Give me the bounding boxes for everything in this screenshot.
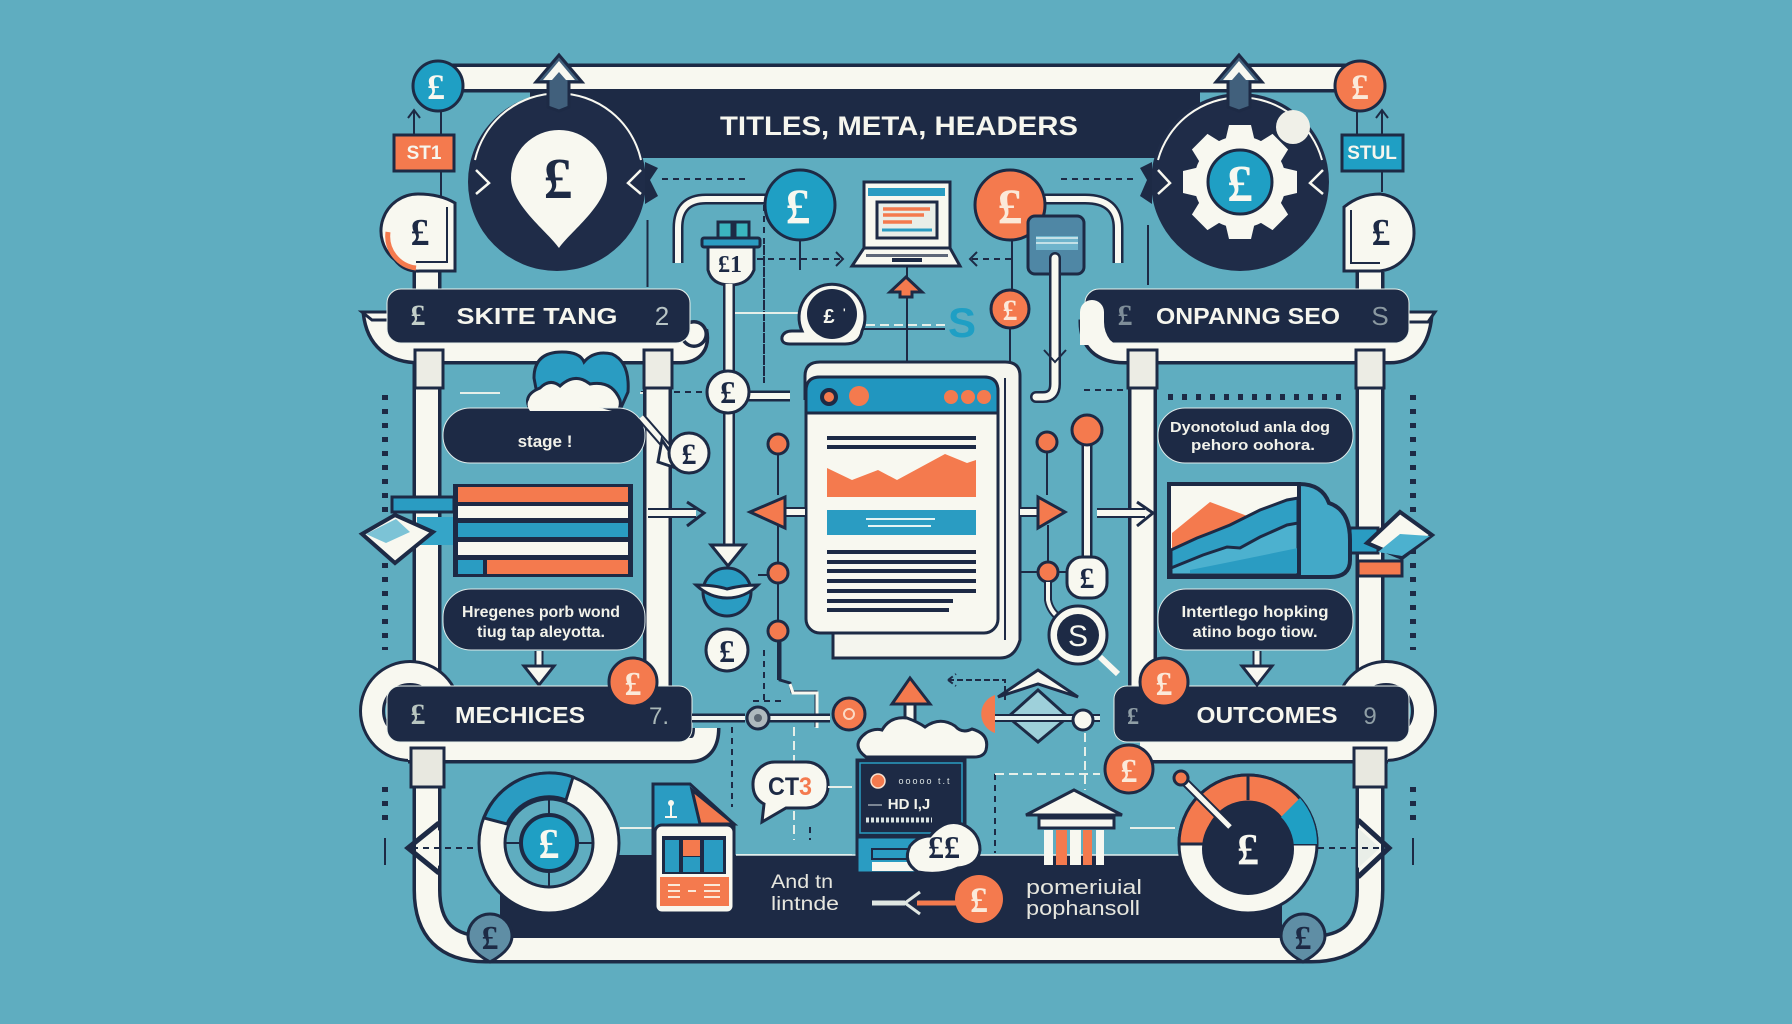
connector: right diamonds	[981, 670, 1100, 742]
title: TITLES, META, HEADERS	[720, 111, 1078, 141]
icon: CT3 speech bubble: CT3	[768, 773, 812, 801]
icon: server panel: HD I,J	[888, 796, 930, 813]
arrow: down on left column	[711, 545, 745, 566]
panel: central document	[805, 362, 1020, 658]
icon: pound badge on rod: £	[1080, 562, 1094, 595]
label: STUL tag: STUL	[1347, 143, 1397, 164]
panel: Dyonotolud text box: pehoro oohora.	[1191, 437, 1315, 454]
panel: Hregenes text box: tiug tap aleyotta.	[477, 624, 605, 641]
section: Outcomes pipe and bar: 9	[1363, 703, 1377, 730]
arrow: left block right	[648, 502, 704, 526]
icon: coin pill: £	[823, 306, 835, 328]
icon: small orange up arrow	[890, 277, 922, 297]
section: Outcomes pipe and bar: OUTCOMES	[1196, 702, 1338, 728]
arrow: down to Outcomes	[1242, 651, 1272, 685]
icon: arrow to pound circle: £	[682, 438, 696, 471]
icon: plug with pound	[702, 222, 760, 285]
text: Pomeriual pophansoll: pomeriuial	[1026, 877, 1142, 899]
panel: Hregenes text box: Hregenes porb wond	[462, 604, 620, 621]
icon: fork arrow with orange pound	[872, 875, 1003, 923]
arrow: down to Mechices	[524, 651, 554, 685]
icon: temple	[1026, 790, 1122, 865]
chart: right mountain area	[1169, 484, 1378, 577]
panel: Intertlego text box	[1158, 589, 1353, 650]
icon: report sheet	[653, 784, 734, 913]
icon: S mark: S	[948, 299, 976, 346]
text: Pomeriual pophansoll: pophansoll	[1026, 898, 1140, 920]
icon: bottom right pound coin	[1281, 914, 1325, 962]
icon: right top arrow	[1216, 55, 1262, 111]
frame: outer pipe	[427, 78, 1370, 949]
section: Outcomes pipe and bar	[1105, 658, 1424, 793]
icon: bottom left pound coin: £	[482, 920, 498, 957]
icon: pound node with rod	[707, 371, 790, 413]
connector: left junction	[692, 642, 865, 730]
text: Pomeriual pophansoll	[1026, 877, 1142, 920]
connector: left curved pipe	[678, 199, 778, 263]
connector: right curved pipe	[1045, 199, 1118, 263]
label: ST1 tag	[394, 135, 454, 171]
label: STUL tag	[1342, 135, 1403, 171]
section: Mechices pipe and bar: £	[410, 698, 426, 731]
panel: Dyonotolud text box: Dyonotolud anla dog	[1170, 419, 1330, 436]
section: Skite Tang pipe and bar: 2	[655, 301, 669, 331]
icon: right gear medallion	[1140, 93, 1329, 271]
panel: title banner	[530, 92, 1200, 158]
icon: left pin medallion: £	[544, 146, 572, 211]
panel: Hregenes text box	[443, 589, 645, 650]
icon: magnifier: S	[1068, 620, 1088, 653]
arrow: right frame arrow	[1318, 820, 1389, 877]
icon: orange node dots	[768, 415, 1102, 641]
icon: plug with pound: £1	[718, 252, 742, 278]
icon: pound circle bottom: £	[719, 633, 735, 669]
arrow: into right block	[1097, 502, 1153, 526]
icon: pound node with rod: £	[720, 374, 736, 410]
panel: Dyonotolud text box	[1158, 408, 1353, 463]
section: Skite Tang pipe and bar	[362, 289, 708, 388]
section: Mechices pipe and bar	[372, 658, 706, 787]
section: Skite Tang pipe and bar: SKITE TANG	[456, 303, 618, 329]
icon: small orange pound	[991, 290, 1029, 328]
section: Outcomes pipe and bar: £	[1127, 704, 1139, 730]
icon: bottom left pound coin	[468, 914, 512, 962]
panel: bottom banner	[500, 855, 1282, 938]
icon: pound badge on rod	[1067, 557, 1107, 598]
panel: stage box	[443, 408, 645, 463]
icon: orange pound corner	[1335, 61, 1385, 111]
icon: blue pound circle	[765, 170, 835, 240]
section: Onpanng SEO pipe and bar: ONPANNG SEO	[1156, 303, 1340, 329]
label: ST1 tag: ST1	[407, 143, 442, 164]
icon: bottom right pound coin: £	[1294, 920, 1312, 957]
section: Skite Tang pipe and bar: £	[410, 299, 426, 332]
icon: double pound cloud: ££	[928, 829, 960, 865]
arrow: cloud up orange	[892, 678, 930, 725]
icon: CT3 speech bubble	[753, 762, 828, 822]
icon: server panel: ooooo t.t	[898, 776, 952, 786]
chart: left stacked bars	[392, 484, 633, 577]
icon: left pound badge: £	[410, 212, 430, 254]
chart: gauge	[1174, 771, 1317, 913]
section: Mechices pipe and bar: 7.	[649, 703, 669, 730]
icon: server panel	[857, 760, 965, 873]
section: Outcomes pipe and bar: £	[1120, 753, 1138, 790]
section: Onpanng SEO pipe and bar: £	[1118, 299, 1132, 332]
panel: Intertlego text box: atino bogo tiow.	[1192, 624, 1318, 641]
icon: arrow to pound circle	[641, 417, 709, 473]
section: Outcomes pipe and bar: £	[1156, 666, 1172, 703]
icon: upload cloud	[858, 718, 987, 757]
section: Mechices pipe and bar: £	[624, 666, 642, 703]
icon: orange pound corner: £	[1351, 67, 1369, 107]
icon: double pound cloud	[907, 822, 980, 873]
icon: coin pill: '	[843, 307, 846, 319]
icon: left pin medallion	[468, 93, 658, 271]
icon: laptop	[852, 182, 960, 266]
icon: fork arrow with orange pound: £	[970, 880, 988, 920]
chart: left donut	[479, 773, 619, 913]
icon: left top arrow	[536, 55, 582, 111]
text: And to lintnde	[771, 872, 839, 915]
icon: magnifier	[1049, 606, 1118, 674]
icon: globe with wings	[696, 568, 758, 616]
text: And to lintnde: And tn	[771, 872, 833, 893]
icon: right diamond	[1358, 512, 1432, 576]
icon: left pound badge	[381, 194, 455, 271]
icon: coin pill	[782, 284, 865, 344]
icon: blue pound circle: £	[786, 178, 810, 234]
icon: orange pound circle	[975, 170, 1045, 240]
icon: blue pound corner	[413, 61, 463, 111]
icon: blue pound corner: £	[427, 67, 445, 107]
icon: right pound badge: £	[1372, 212, 1390, 254]
chart: gauge: £	[1237, 825, 1259, 874]
panel: Intertlego text box: Intertlego hopking	[1182, 604, 1328, 621]
text: And to lintnde: lintnde	[771, 894, 839, 915]
arrow: right orange	[1020, 497, 1065, 528]
icon: left diamond	[362, 515, 433, 563]
icon: pound circle bottom	[706, 629, 748, 671]
icon: cloud on stage box	[528, 352, 628, 412]
chart: left donut: £	[538, 822, 560, 868]
icon: right status box	[1028, 216, 1084, 397]
section: Mechices pipe and bar: MECHICES	[455, 702, 585, 728]
section: Onpanng SEO pipe and bar	[1080, 289, 1435, 388]
arrow: left orange	[750, 497, 805, 528]
arrow: left frame arrow	[408, 823, 478, 873]
icon: small orange pound: £	[1002, 294, 1018, 327]
icon: right pound badge	[1344, 194, 1414, 271]
section: Onpanng SEO pipe and bar: S	[1371, 301, 1389, 331]
panel: stage box: stage !	[518, 432, 572, 451]
icon: orange pound circle: £	[998, 178, 1022, 234]
icon: right gear medallion: £	[1227, 156, 1253, 213]
